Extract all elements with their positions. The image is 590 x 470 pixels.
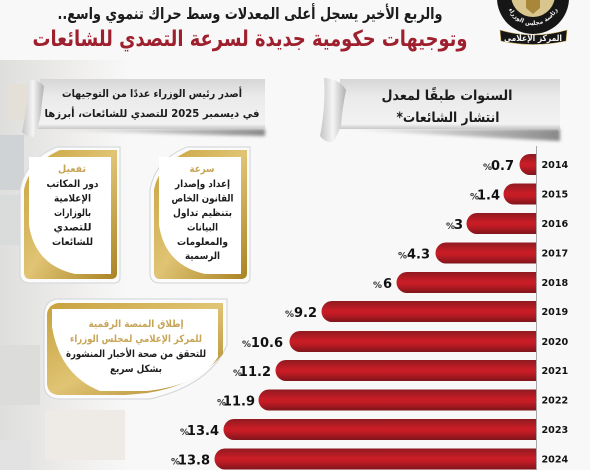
bar 2015 <box>470 184 568 204</box>
card: speed: البيانات <box>187 222 218 234</box>
bar 2019 <box>285 301 569 322</box>
chart axis <box>536 146 537 470</box>
logo: media center emblem: المركز الإعلامي <box>504 34 562 44</box>
card: activation: للتصدي <box>54 222 92 234</box>
bar 2022 <box>217 390 568 410</box>
bar 2016: 3 <box>454 218 463 233</box>
bar 2021: 2021 <box>542 366 569 377</box>
bar 2021: 11.2 <box>239 365 271 380</box>
card: speed: والمعلومات <box>177 237 228 248</box>
bar 2015: 1.4 <box>477 188 500 204</box>
bar 2024 <box>171 448 569 470</box>
title line 1: والربع الأخير يسجل أعلى المعدلات وسط حراك تنموي واسع.. <box>58 3 442 24</box>
title line 2: وتوجيهات حكومية جديدة لسرعة التصدي للشائعات <box>32 27 468 52</box>
bar 2018: 2018 <box>542 278 569 289</box>
bar 2022: % <box>217 398 226 408</box>
bar 2017: 4.3 <box>407 248 430 262</box>
card: activation: الإعلامية <box>54 194 91 204</box>
bar 2021 <box>233 360 569 381</box>
bar 2023: % <box>180 428 189 438</box>
faded photo collage background <box>0 60 130 470</box>
bar chart: rumor spread by year <box>171 146 569 470</box>
card: speed: الرسمية <box>185 251 220 262</box>
bar 2016: 2016 <box>542 219 569 230</box>
card: activation: تفعيل <box>58 164 86 175</box>
left banner: directives intro: أصدر رئيس الوزراء عددًا من التوجيهات <box>62 86 242 100</box>
card: digital platform: بشكل سريع <box>110 364 162 375</box>
logo: media center emblem: رئاسة مجلس الوزراء <box>508 8 558 26</box>
bar 2023: 13.4 <box>187 424 219 439</box>
bar 2019: 9.2 <box>294 306 317 321</box>
card: digital platform: للتحقق من صحة الأخبار المنشورة <box>66 347 206 360</box>
bar 2016 <box>446 213 569 234</box>
bar 2022: 2022 <box>542 396 568 406</box>
bar 2015: % <box>470 192 479 202</box>
bar 2024: 2024 <box>542 454 569 466</box>
right banner: chart heading <box>320 78 560 142</box>
bar 2014: 0.7 <box>491 159 514 174</box>
bar 2017: 2017 <box>542 248 568 260</box>
bar 2014: % <box>483 163 492 173</box>
bar 2019: % <box>285 310 294 320</box>
bar 2018: % <box>373 281 382 291</box>
bar 2014: 2014 <box>542 160 569 171</box>
bar 2014 <box>483 154 569 175</box>
bar 2020: % <box>242 340 251 350</box>
card: speed: بتنظيم تداول <box>173 208 232 219</box>
bar 2020: 10.6 <box>251 336 283 351</box>
card: digital platform: للمركز الإعلامي لمجلس الوزراء <box>70 334 202 345</box>
bar 2023: 2023 <box>542 425 568 436</box>
card: activation: بالوزارات <box>54 208 91 219</box>
right banner: chart heading: انتشار الشائعات* <box>396 110 500 126</box>
bar 2019: 2019 <box>542 307 569 318</box>
card: activation: للشائعات <box>52 237 93 248</box>
card: speed: إعداد وإصدار <box>174 179 230 190</box>
bar 2020 <box>242 331 569 352</box>
bar 2022: 11.9 <box>223 394 255 410</box>
bar 2017: % <box>398 252 407 262</box>
bar 2018: 6 <box>383 277 392 292</box>
bar 2023 <box>180 419 568 440</box>
right banner: chart heading: السنوات طبقًا لمعدل <box>382 87 512 104</box>
card: digital platform <box>44 299 227 399</box>
card: speed: القانون الخاص <box>172 194 234 204</box>
bar 2018 <box>373 272 569 293</box>
bar 2020: 2020 <box>542 337 569 348</box>
logo: media center emblem <box>497 0 569 45</box>
bar 2021: % <box>233 369 242 379</box>
card: speed <box>150 147 250 283</box>
card: activation: دور المكاتب <box>46 179 98 190</box>
bar 2016: % <box>446 222 455 232</box>
left banner: directives intro <box>22 79 265 137</box>
card: speed: سرعة <box>190 164 215 175</box>
card: digital platform: إطلاق المنصة الرقمية <box>88 319 184 330</box>
left banner: directives intro: في ديسمبر 2025 للتصدي للشائعات، أبرزها <box>44 106 260 120</box>
bar 2024: % <box>171 458 180 468</box>
bar 2024: 13.8 <box>178 454 210 468</box>
card: activation <box>20 147 120 283</box>
bar 2015: 2015 <box>542 190 568 200</box>
bar 2017 <box>398 242 568 264</box>
